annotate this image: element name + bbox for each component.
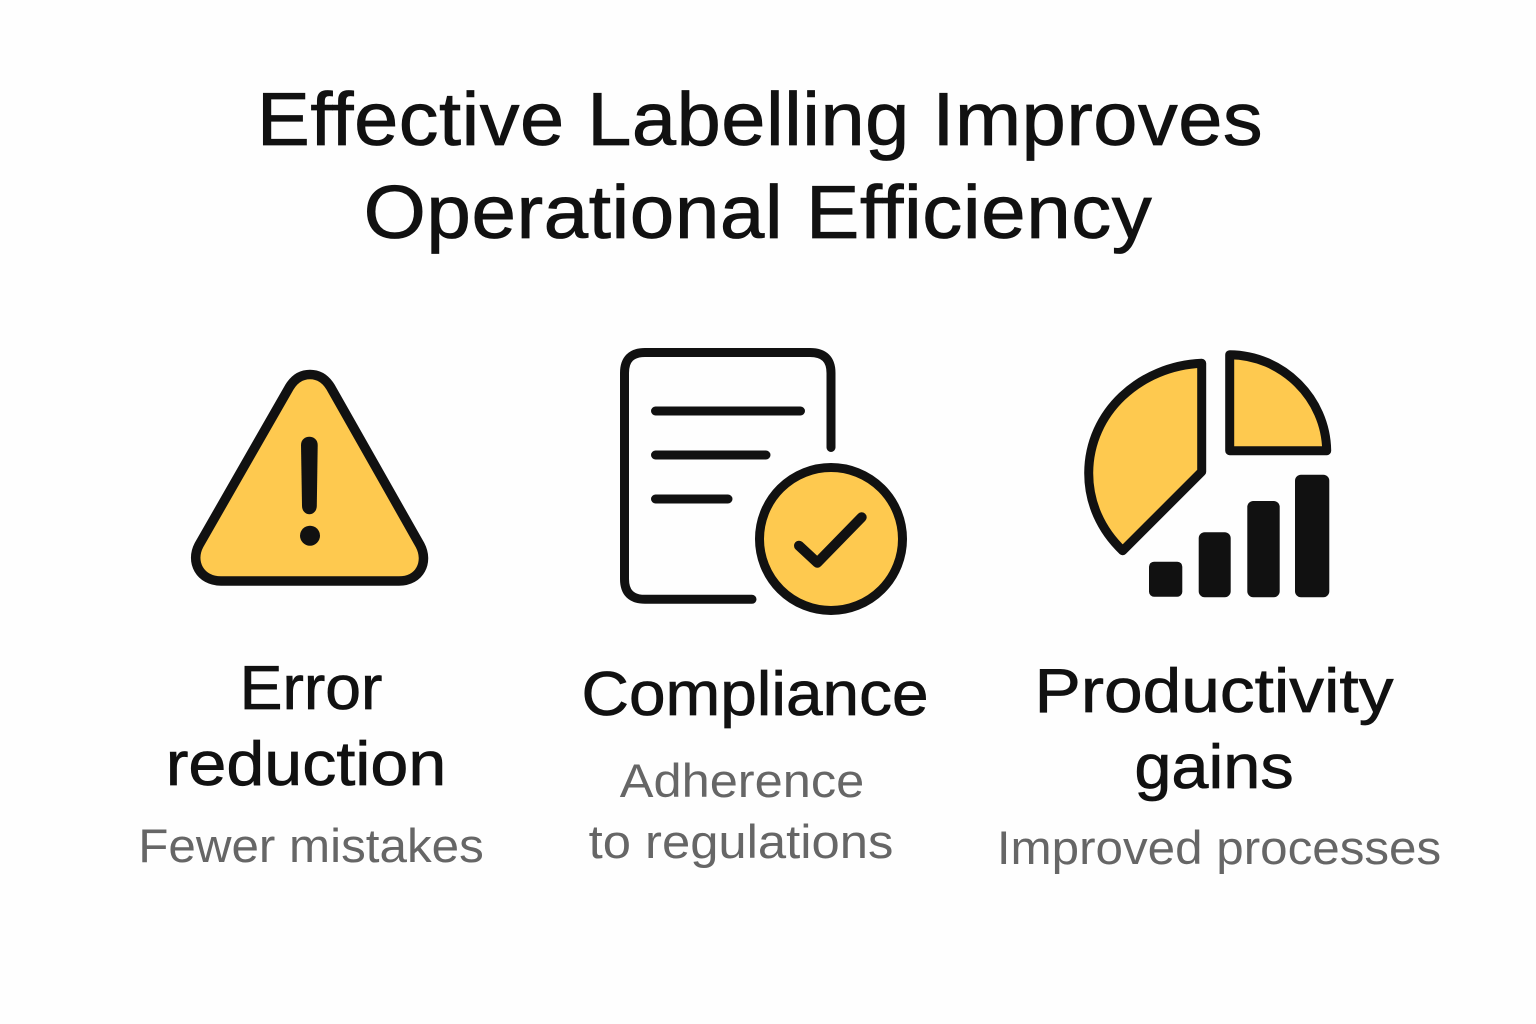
icon: document with check badge	[620, 348, 907, 615]
icon: warning triangle	[190, 370, 428, 586]
icon: pie and bar chart	[1084, 350, 1332, 598]
heading: productivity gains: Productivity	[1035, 657, 1393, 726]
heading: error reduction: reduction	[166, 730, 446, 799]
title: Effective Labelling Improves	[257, 77, 1263, 161]
text: adherence to regulations: to regulations	[589, 815, 893, 868]
title: Operational Efficiency	[364, 170, 1152, 254]
text: adherence to regulations	[589, 754, 893, 868]
text: fewer mistakes: Fewer mistakes	[138, 819, 484, 872]
heading: compliance: Compliance	[581, 660, 929, 729]
heading: productivity gains: gains	[1134, 733, 1294, 802]
heading: productivity gains	[1035, 657, 1394, 802]
heading: error reduction: Error	[240, 654, 382, 723]
text: improved processes: Improved processes	[997, 821, 1441, 874]
text: adherence to regulations: Adherence	[620, 754, 864, 807]
heading: error reduction	[166, 654, 446, 799]
title	[257, 77, 1263, 254]
